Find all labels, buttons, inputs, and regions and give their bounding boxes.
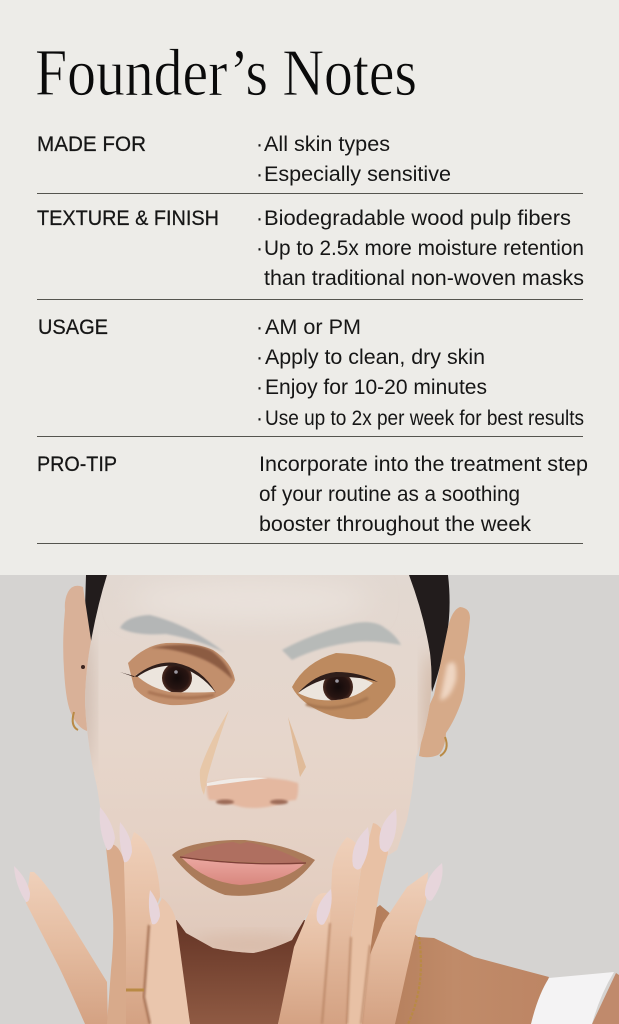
left hand nails [14,807,160,924]
label: made for: MADE FOR [37,133,146,156]
list: usage: · [256,407,263,430]
list: usage: Enjoy for 10-20 minutes [265,376,487,399]
left hand [14,807,190,1024]
list: usage: · [256,316,263,339]
list: texture and finish: · [256,237,263,260]
left eye [120,643,235,705]
list: usage [256,316,584,430]
row: made for [37,133,451,186]
list: made for: · [256,133,263,156]
finger 2 [106,844,130,1024]
finger 3 [124,832,160,1024]
label: texture and finish: TEXTURE & FINISH [37,207,219,230]
list: texture and finish: Biodegradable wood pulp fibers [264,207,571,230]
finger 1 [26,872,108,1024]
row: usage [38,316,584,430]
right hand [278,809,443,1024]
right eye [292,653,396,719]
list: usage: AM or PM [265,316,361,339]
list: usage: Use up to 2x per week for best results [265,407,584,430]
list: made for [256,133,451,186]
finger A [278,893,332,1024]
nose [200,710,306,808]
list: texture and finish [256,207,584,290]
sheet mask on face [85,575,432,953]
list: usage: · [256,376,263,399]
background panel [0,0,619,575]
left ear [63,586,100,731]
right eyebrow [282,622,401,660]
row: pro-tip [37,453,588,536]
right hand nails [317,809,443,925]
white top strap [531,972,614,1024]
mask shading [76,580,440,955]
ring [126,988,144,992]
list: texture and finish: · [256,207,263,230]
right earring [440,737,447,756]
hair [84,575,450,692]
text: pro-tip: of your routine as a soothing [259,483,520,506]
finger D [361,872,428,1024]
text: pro-tip [259,453,588,536]
finger C [347,823,388,1024]
row: texture and finish [37,207,584,290]
label: usage: USAGE [38,316,108,339]
list: made for: · [256,163,263,186]
text: pro-tip: Incorporate into the treatment step [259,453,588,476]
list: usage: · [256,346,263,369]
list: texture and finish: than traditional non-woven masks [264,267,584,290]
finger 4 [144,898,190,1024]
list: made for: All skin types [264,133,390,156]
necklace [408,937,421,1024]
list: made for: Especially sensitive [264,163,451,186]
finger B [322,837,362,1024]
title: Founder’s Notes [35,36,417,110]
list: texture and finish: Up to 2.5x more moisture retention [264,237,584,260]
photo: woman wearing sheet mask [0,575,619,1024]
list: usage: Apply to clean, dry skin [265,346,485,369]
text: pro-tip: booster throughout the week [259,513,532,536]
label: pro-tip: PRO-TIP [37,453,117,476]
left eyebrow [120,615,225,653]
left earring [73,712,78,730]
shoulder and neck [172,905,619,1024]
lips [172,840,315,896]
right ear [419,607,470,757]
